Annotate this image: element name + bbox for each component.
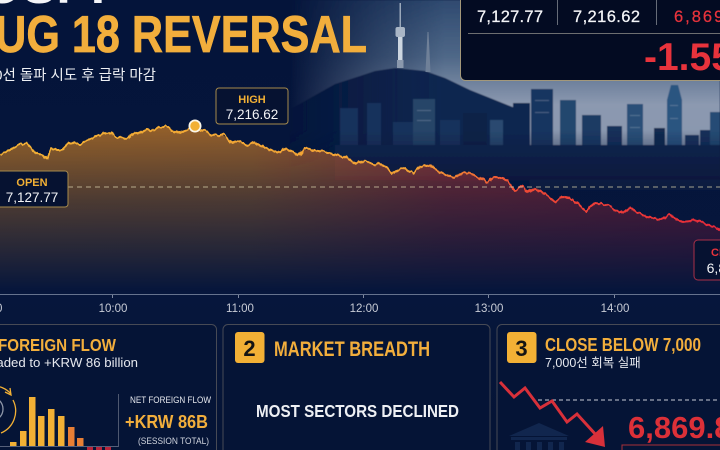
callout: open: 7,127.77 <box>6 190 58 205</box>
callout: high <box>216 88 288 124</box>
badge: 3: 3 <box>515 336 528 361</box>
text: net foreign flow total <box>125 395 211 447</box>
icon: Namsan tower <box>396 3 430 72</box>
time axis <box>0 294 720 315</box>
bar chart: net foreign flow <box>0 397 118 450</box>
stats panel <box>460 0 720 80</box>
time axis: 11:00 <box>226 303 254 315</box>
badge: 2: 2 <box>243 336 256 361</box>
text: net foreign flow total: +KRW 86B <box>125 411 208 432</box>
badge: 3 <box>507 332 536 363</box>
stats panel: 7,127.77 <box>477 8 543 26</box>
icon: globe with arrow <box>0 386 16 433</box>
time axis: 10:00 <box>99 303 127 315</box>
arrow: falling trend <box>500 382 605 447</box>
chart: intraday price line <box>0 127 720 294</box>
panel: close below 7,000 <box>497 324 720 450</box>
stats panel: 7,216.62 <box>573 8 640 26</box>
time axis: 14:00 <box>601 303 629 315</box>
callout: close <box>694 240 720 280</box>
heading: market breadth: MARKET BREADTH <box>274 338 430 361</box>
text: most sectors declined: MOST SECTORS DECLINED <box>256 401 459 421</box>
icon: bank <box>509 423 569 450</box>
callout: open <box>0 171 68 207</box>
panel: market breadth <box>223 324 490 450</box>
subtext: 7,000 recovery failed: 7,000선 회복 실패 <box>545 356 641 370</box>
skyline photo: Seoul with tower <box>285 0 720 190</box>
high point marker <box>189 120 201 132</box>
badge: 2 <box>235 332 264 363</box>
time axis: 12:00 <box>350 303 378 315</box>
panel: foreign flow <box>0 324 216 450</box>
text: net foreign flow total: NET FOREIGN FLOW <box>130 395 211 406</box>
heading: foreign flow: FOREIGN FLOW <box>0 335 116 355</box>
text: net foreign flow total: (SESSION TOTAL) <box>138 436 209 447</box>
callout: high: 7,216.62 <box>226 107 278 122</box>
callout: high: HIGH <box>238 94 266 106</box>
callout: open: OPEN <box>16 177 48 189</box>
time axis: 13:00 <box>475 303 503 315</box>
